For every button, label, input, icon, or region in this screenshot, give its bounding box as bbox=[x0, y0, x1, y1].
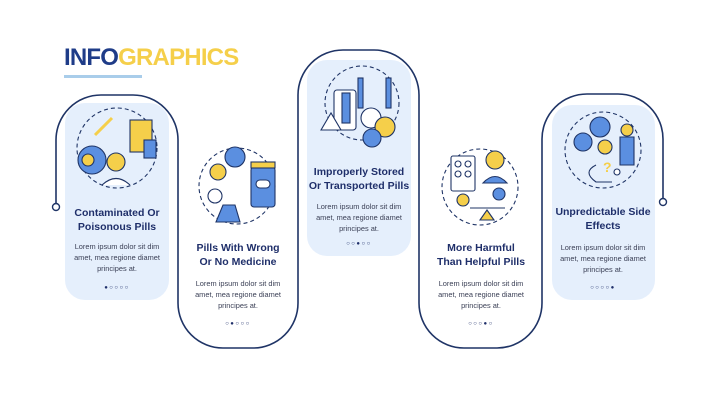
icon 5: ? bbox=[603, 159, 612, 175]
card 4 text: Lorem ipsum dolor sit dim amet, mea regione diamet principes at. bbox=[438, 279, 524, 310]
card 2 text: Lorem ipsum dolor sit dim amet, mea regione diamet principes at. bbox=[195, 279, 281, 310]
icon 3 bbox=[321, 66, 399, 147]
card 5 text: ○○○○● bbox=[590, 285, 616, 291]
card backgrounds bbox=[65, 60, 655, 300]
card 5 text: Lorem ipsum dolor sit dim amet, mea regione diamet principes at. bbox=[560, 243, 646, 274]
card 2 text bbox=[195, 242, 281, 327]
card 5 text bbox=[555, 206, 651, 291]
card 4 text: ○○○●○ bbox=[468, 321, 494, 327]
icon 5 bbox=[565, 112, 641, 188]
card 1 text bbox=[74, 207, 160, 291]
card 4 text: More Harmful Than Helpful Pills bbox=[437, 242, 525, 268]
card 3 text: Lorem ipsum dolor sit dim amet, mea regione diamet principes at. bbox=[316, 202, 402, 233]
card 3 text bbox=[309, 166, 409, 247]
card 4 text bbox=[437, 242, 525, 327]
card 3 text: Improperly Stored Or Transported Pills bbox=[309, 166, 409, 192]
snake outline bbox=[56, 50, 663, 348]
card 1 text: Lorem ipsum dolor sit dim amet, mea regione diamet principes at. bbox=[74, 242, 160, 273]
card 2 text: ○●○○○ bbox=[225, 321, 251, 327]
card 5 text: Unpredictable Side Effects bbox=[555, 206, 651, 232]
icon 4 bbox=[442, 149, 518, 225]
card 2 text: Pills With Wrong Or No Medicine bbox=[196, 242, 280, 268]
card 3 text: ○○●○○ bbox=[346, 241, 372, 247]
title: INFOGRAPHICS bbox=[64, 44, 238, 71]
icon 2 bbox=[199, 147, 275, 224]
card 1 text: ●○○○○ bbox=[104, 285, 130, 291]
icon 1 bbox=[77, 108, 157, 188]
card 1 text: Contaminated Or Poisonous Pills bbox=[74, 207, 160, 233]
